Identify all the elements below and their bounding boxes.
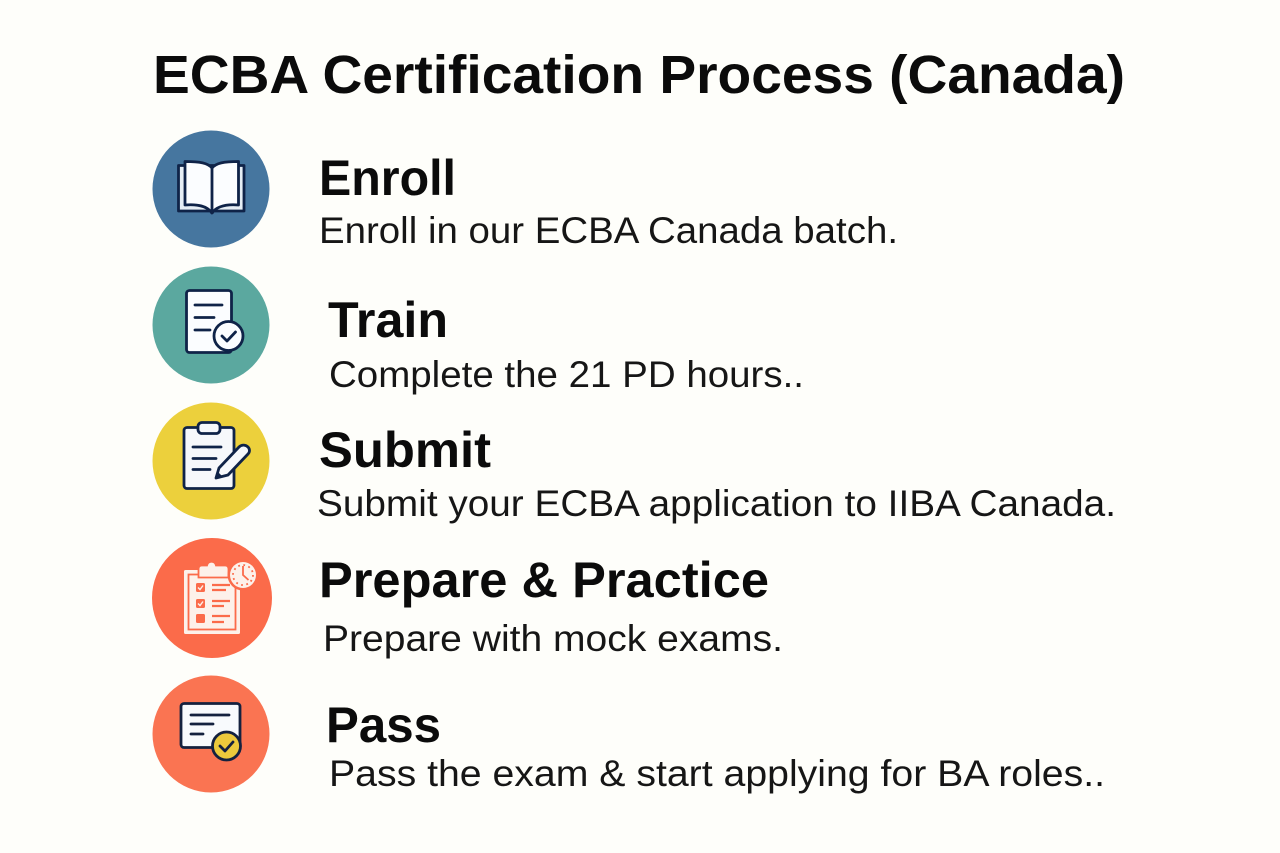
text: train description: Complete the 21 PD hours..	[329, 354, 804, 395]
text: enroll description: Enroll in our ECBA Canada batch.	[319, 210, 898, 251]
step 3: submit	[152, 402, 1116, 524]
step 5: pass	[152, 676, 1105, 794]
text: submit description: Submit your ECBA application to IIBA Canada.	[317, 483, 1116, 524]
text: pass description: Pass the exam & start applying for BA roles..	[329, 753, 1105, 794]
title: ECBA Certification Process (Canada)	[153, 45, 1125, 105]
heading: Submit: Submit	[319, 422, 491, 478]
icon: certificate with check badge	[152, 676, 270, 792]
icon: clipboard with pencil	[152, 402, 270, 520]
step 2: train	[152, 266, 804, 395]
icon: document with check	[152, 266, 270, 384]
heading: Train: Train	[328, 292, 448, 348]
step 1: enroll	[152, 130, 898, 251]
icon: checklist with clock	[152, 538, 272, 658]
heading: Pass: Pass	[326, 697, 441, 753]
heading: Prepare & Practice: Prepare & Practice	[319, 552, 769, 608]
step 4: prepare & practice	[152, 538, 783, 659]
heading: Enroll: Enroll	[319, 150, 456, 206]
icon: open book	[152, 130, 270, 248]
text: prepare description: Prepare with mock exams.	[323, 618, 783, 659]
